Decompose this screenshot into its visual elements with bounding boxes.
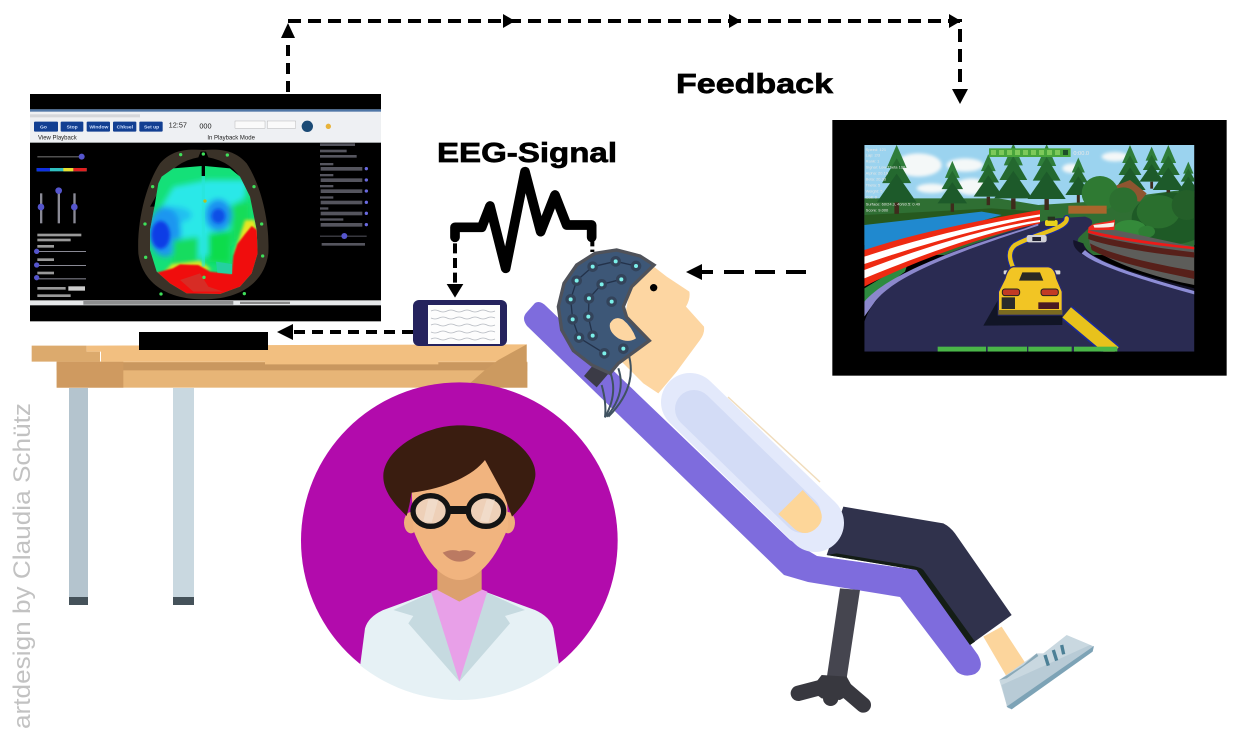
software toolbar: 000 <box>199 121 212 130</box>
tablet EEG recorder <box>413 300 507 346</box>
software toolbar: Set up <box>144 124 159 130</box>
brain scan map <box>138 150 269 300</box>
hand <box>778 490 822 533</box>
right control sliders <box>320 143 368 246</box>
HUD stats text: Surface: 60/24.3, 40/s0.5: 0.49 <box>866 202 921 207</box>
torso edge <box>728 397 820 482</box>
face and neck <box>617 265 704 393</box>
HUD health bar: 0:00.0 <box>1073 151 1089 157</box>
monitor: brain mapping software <box>30 94 381 321</box>
HUD stats text: Alpha: 20.10 <box>866 170 889 175</box>
EEG electrode cap <box>558 250 654 417</box>
shin and shoe <box>983 627 1094 709</box>
software toolbar: Chksel <box>117 124 134 130</box>
software toolbar: Window <box>89 124 109 130</box>
software toolbar: Stop <box>67 124 78 130</box>
HUD stats text <box>866 147 921 213</box>
lips <box>443 550 476 562</box>
software toolbar: In Playback Mode <box>207 135 256 141</box>
pine trees <box>877 143 1199 214</box>
trousers <box>827 507 1012 645</box>
bushes <box>1082 176 1194 244</box>
monitor stand bar <box>139 332 268 350</box>
racing game scene <box>864 143 1212 352</box>
HUD stats text: Beta: 20.33 <box>866 176 887 181</box>
neck <box>437 567 482 602</box>
HUD stats text: Coil: 0 <box>866 194 878 199</box>
HUD stats text: Lap: 2/3 <box>866 153 881 158</box>
arrow: tablet to monitor <box>277 324 413 340</box>
feedback dashed arrow loop <box>281 14 968 104</box>
software toolbar <box>30 109 381 143</box>
software toolbar: View Playback <box>38 135 77 141</box>
EEG signal waveform <box>447 172 592 298</box>
heading: Feedback: Feedback <box>676 68 834 99</box>
HUD stats text: Speed: 121 <box>866 147 887 152</box>
HUD stats text: Theta: 5 <box>866 182 881 187</box>
status strip <box>30 300 381 305</box>
software toolbar: 12:57 <box>169 121 187 130</box>
HUD health bar <box>989 148 1089 157</box>
ear <box>610 318 636 341</box>
purple circle <box>301 382 618 699</box>
HUD stats text: Score: 9.000 <box>866 208 889 213</box>
HUD stats text: Rank: 1 <box>866 158 880 163</box>
HUD stats text: Signal: Low Theta 100 <box>866 164 906 169</box>
yellow sports car <box>998 267 1062 315</box>
chair base <box>798 588 863 705</box>
face and ears <box>404 460 515 580</box>
reclining chair <box>524 302 981 676</box>
patient <box>558 250 1094 709</box>
green power bar <box>938 347 1117 352</box>
software toolbar: Go <box>40 124 47 130</box>
car shadow <box>984 300 1062 326</box>
distant cars <box>1027 217 1058 242</box>
road <box>864 217 1194 352</box>
HUD stats text: Weight: 5 <box>866 188 883 193</box>
desk <box>32 344 527 605</box>
strap and wires <box>584 353 631 417</box>
left control sliders <box>34 154 87 297</box>
right barrier wall <box>1088 220 1194 285</box>
electrodes <box>567 258 640 357</box>
shirt <box>690 402 815 523</box>
doctor avatar <box>301 382 618 710</box>
game screen <box>832 120 1227 376</box>
lab coat <box>360 589 559 710</box>
desk top <box>32 344 527 388</box>
yellow road line <box>1010 218 1114 352</box>
hut <box>1113 180 1147 202</box>
water <box>864 212 1002 250</box>
red-white barrier <box>864 210 1040 287</box>
glasses <box>413 496 504 526</box>
hair <box>383 425 535 517</box>
heading: EEG-Signal: EEG-Signal <box>437 137 617 168</box>
grass strip <box>864 266 907 302</box>
arrow: game screen to patient <box>686 264 806 280</box>
cap wire lines <box>571 261 636 353</box>
desk legs <box>69 388 194 605</box>
credit text: artdesign by Claudia Schütz <box>9 403 36 729</box>
